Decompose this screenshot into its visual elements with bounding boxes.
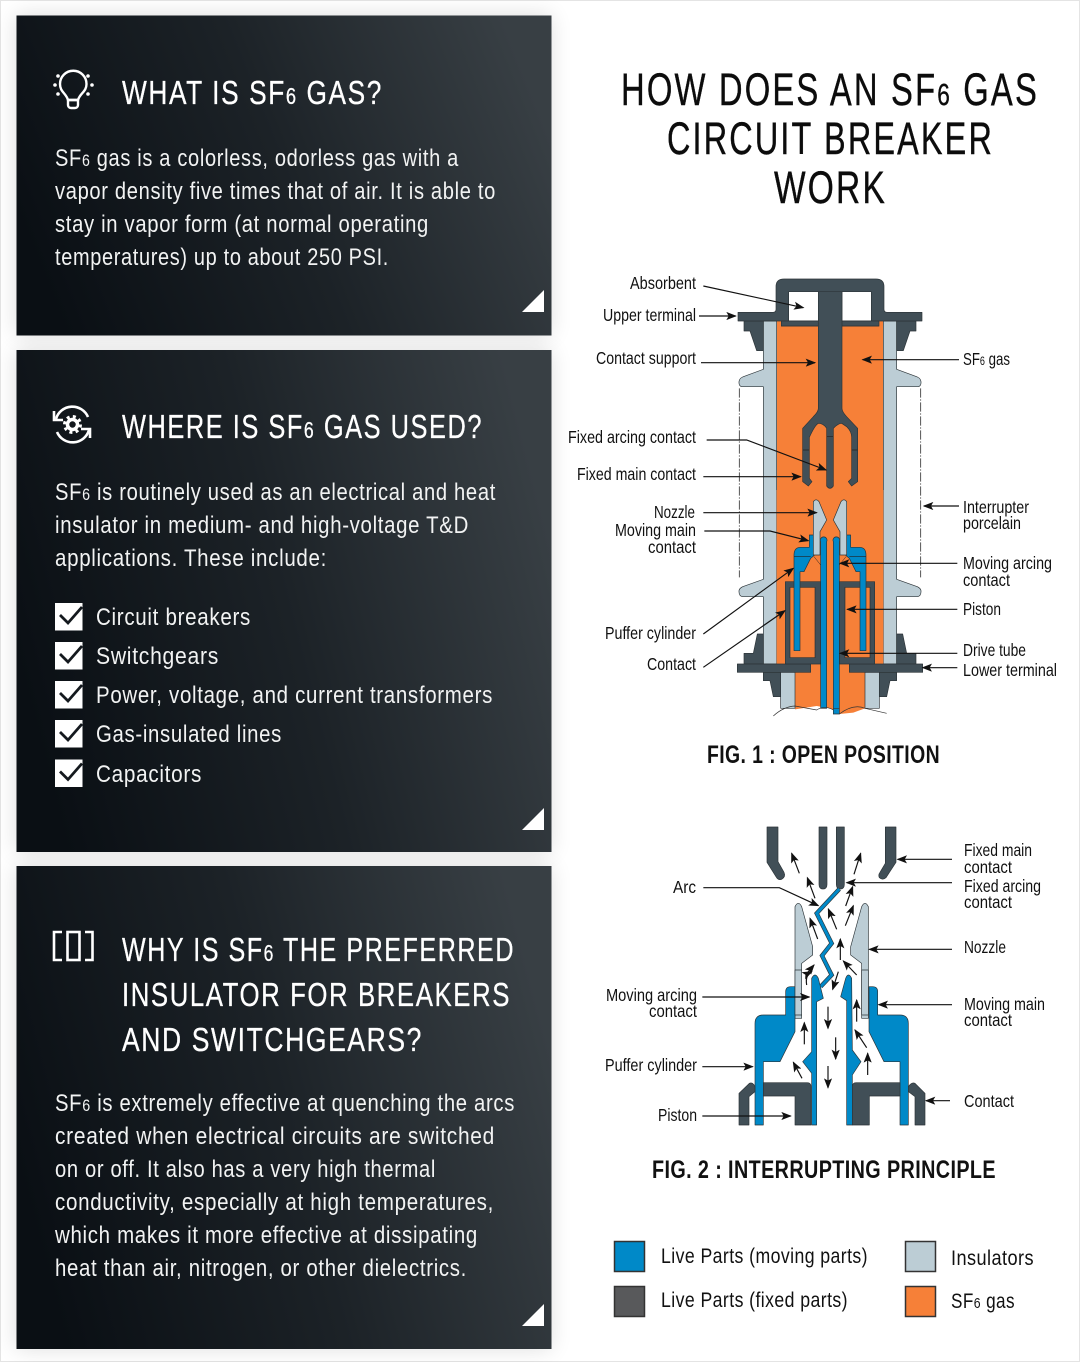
text block: definition: vapor density five times that of air. It is able to (55, 178, 496, 205)
labels figure 2: contact (649, 1001, 697, 1021)
labels figure 2: Piston (658, 1105, 697, 1125)
labels figure 1: Moving arcing (963, 553, 1052, 573)
labels figure 1: Nozzle (654, 502, 695, 522)
diagram: figure 1 open position (568, 273, 1057, 769)
text block: explanation: which makes it more effective at dissipating (54, 1222, 478, 1249)
checklist: Power, voltage, and current transformers (96, 682, 493, 709)
text block: explanation: heat than air, nitrogen, or other dielectrics. (55, 1255, 467, 1282)
text block: explanation: conductivity, especially at high temperatures, (55, 1189, 494, 1216)
labels figure 2: Contact (964, 1091, 1014, 1111)
panel: what is SF6 gas (16, 16, 552, 336)
title (621, 64, 1039, 213)
heading: what is SF6 gas: WHAT IS SF6 GAS? (122, 74, 383, 111)
heading: where is SF6 gas used: WHERE IS SF6 GAS USED? (122, 408, 483, 445)
leader arrows figure 1 upper (699, 286, 959, 477)
text block: explanation (54, 1090, 515, 1282)
text block: uses intro: insulator in medium- and high-voltage T&D (55, 512, 469, 539)
checklist (55, 603, 493, 788)
labels figure 2 (605, 840, 1045, 1125)
labels figure 2: Moving arcing (606, 985, 697, 1005)
text block: definition: stay in vapor form (at normal operating (55, 211, 429, 238)
labels figure 1: Drive tube (963, 640, 1026, 660)
moving contacts, piston and flow arrows (702, 970, 952, 1125)
labels figure 1: Moving main (615, 520, 696, 540)
labels figure 1: Fixed arcing contact (568, 427, 696, 447)
icon: corner triangle (522, 1304, 544, 1326)
labels figure 2: Fixed main (964, 840, 1032, 860)
legend item: insulators (906, 1242, 1034, 1272)
labels figure 1 (568, 273, 1057, 680)
legend item: live parts moving: Live Parts (moving parts) (661, 1245, 868, 1268)
labels figure 1: Interrupter (963, 497, 1029, 517)
text block: explanation: created when electrical circuits are switched (55, 1123, 495, 1150)
icon: brackets (54, 932, 92, 960)
legend (614, 1242, 1034, 1316)
icon: light bulb (53, 71, 94, 108)
labels figure 1: Fixed main contact (577, 464, 696, 484)
text block: uses intro: applications. These include: (55, 545, 327, 572)
leader arrows figure 1 lower (703, 506, 959, 668)
diagram: figure 2 interrupting principle (605, 827, 1045, 1184)
text block: definition (55, 145, 496, 271)
caption: figure 1: FIG. 1 : OPEN POSITION (707, 741, 940, 769)
icon: rotating gear (54, 407, 90, 442)
heading: why SF6 is preferred (122, 931, 515, 1058)
labels figure 2: contact (964, 857, 1012, 877)
labels figure 1: Upper terminal (603, 305, 696, 325)
text block: uses intro: SF6 is routinely used as an electrical and heat (55, 479, 496, 506)
text block: explanation: SF6 is extremely effective at quenching the arcs (55, 1090, 515, 1117)
labels figure 1: Lower terminal (963, 660, 1057, 680)
caption: figure 2: FIG. 2 : INTERRUPTING PRINCIPLE (652, 1156, 996, 1184)
labels figure 1: SF6 gas (963, 349, 1010, 369)
fixed contacts and arc (703, 827, 952, 1018)
labels figure 2: Puffer cylinder (605, 1055, 697, 1075)
heading: why SF6 is preferred: AND SWITCHGEARS? (122, 1021, 423, 1058)
breaker drawing upper half (738, 279, 922, 664)
legend item: live parts fixed (614, 1286, 848, 1316)
labels figure 1: Contact (647, 654, 696, 674)
labels figure 1: Puffer cylinder (605, 623, 696, 643)
heading: why SF6 is preferred: INSULATOR FOR BREAKERS (122, 976, 511, 1013)
legend item: SF6 gas: SF6 gas (951, 1290, 1015, 1313)
labels figure 2: Fixed arcing (964, 876, 1041, 896)
legend item: SF6 gas (906, 1286, 1015, 1316)
labels figure 2: contact (964, 892, 1012, 912)
labels figure 1: contact (963, 570, 1010, 590)
labels figure 2: Moving main (964, 994, 1045, 1014)
panel: why SF6 is preferred (16, 866, 552, 1349)
labels figure 1: Piston (963, 599, 1001, 619)
checklist: Circuit breakers (96, 604, 251, 631)
labels figure 1: Contact support (596, 348, 696, 368)
text block: explanation: on or off. It also has a very high thermal (55, 1156, 436, 1183)
heading: why SF6 is preferred: WHY IS SF6 THE PREFERRED (122, 931, 515, 968)
title: HOW DOES AN SF6 GAS (621, 64, 1039, 115)
text block: definition: SF6 gas is a colorless, odorless gas with a (55, 145, 459, 172)
labels figure 1: porcelain (963, 513, 1021, 533)
checklist: Switchgears (96, 643, 219, 670)
labels figure 1: contact (648, 537, 696, 557)
text block: definition: temperatures) up to about 250 PSI. (55, 244, 389, 271)
labels figure 2: contact (964, 1010, 1012, 1030)
text block: uses intro (55, 479, 496, 572)
checklist: Capacitors (96, 761, 202, 788)
panel: where is SF6 gas used (16, 350, 552, 852)
legend item: live parts moving (614, 1242, 868, 1272)
icon: corner triangle (522, 290, 544, 312)
icon: corner triangle (522, 808, 544, 830)
breaker drawing lower half (737, 490, 923, 716)
labels figure 2: Arc (673, 877, 696, 897)
title: WORK (774, 162, 887, 213)
labels figure 1: Absorbent (630, 273, 696, 293)
labels figure 2: Nozzle (964, 937, 1006, 957)
legend item: insulators: Insulators (951, 1247, 1034, 1270)
checklist: Gas-insulated lines (96, 721, 282, 748)
legend item: live parts fixed: Live Parts (fixed parts) (661, 1289, 848, 1312)
